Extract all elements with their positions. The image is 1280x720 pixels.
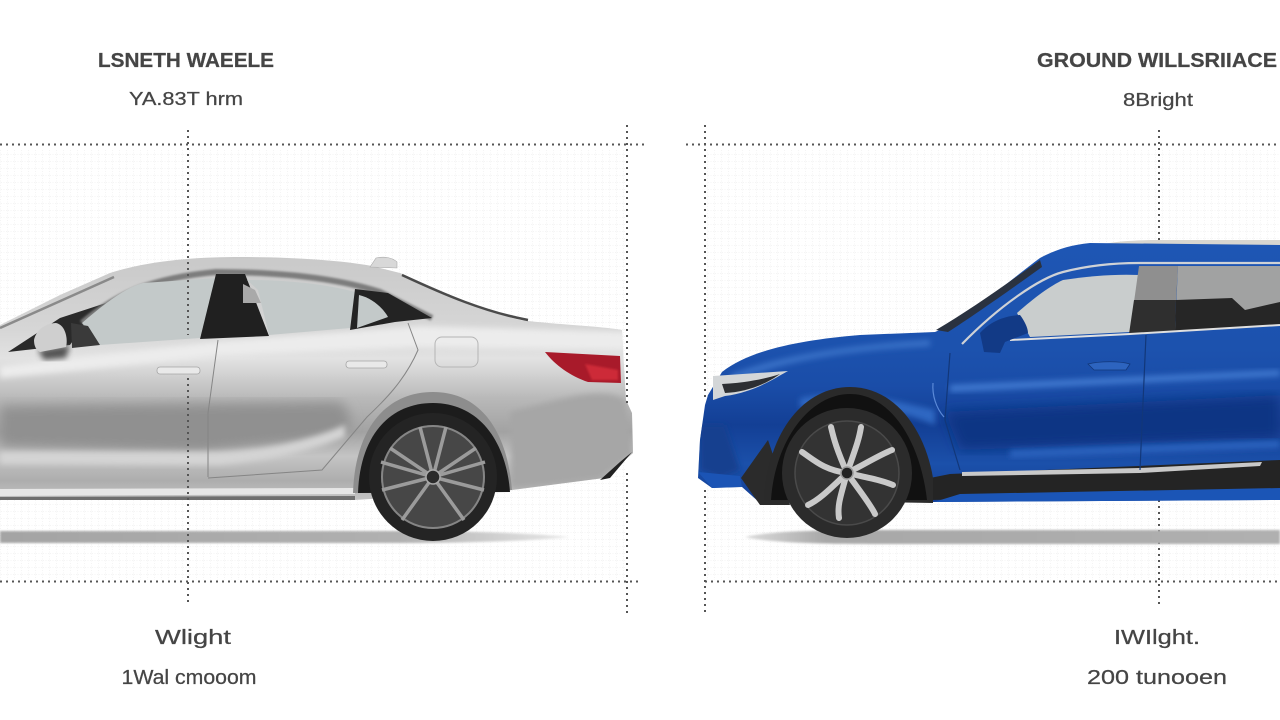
window top trim xyxy=(82,272,432,323)
wheel arch xyxy=(353,392,512,493)
mirror shadow xyxy=(38,345,70,360)
B-pillar xyxy=(200,274,269,339)
front window xyxy=(1017,275,1139,337)
wing mirror xyxy=(34,323,67,352)
dimension lines: right diagram xyxy=(686,125,1280,615)
vertical dimension lines: left diagram xyxy=(188,125,627,615)
blue SUV xyxy=(698,240,1280,538)
C-pillar dark triangle xyxy=(350,289,432,330)
label: right bottom: IWIlght. xyxy=(1114,627,1200,649)
rear window xyxy=(247,280,355,335)
fuel door xyxy=(435,337,478,367)
blue lower lip xyxy=(934,488,1280,502)
antenna fin xyxy=(370,257,397,268)
lower cladding xyxy=(930,460,1280,500)
rear headrest xyxy=(243,284,261,303)
chrome strip xyxy=(962,462,1262,476)
door handle: front xyxy=(157,367,200,374)
background grid panel: left xyxy=(0,150,625,580)
sedan body xyxy=(0,257,633,500)
rear cabin seats xyxy=(1175,298,1280,331)
front wheel xyxy=(782,408,912,538)
label: left bottom: Wlight xyxy=(155,627,232,649)
measurement: right bottom: 200 tunooen xyxy=(1087,667,1227,689)
window chrome xyxy=(962,263,1280,344)
door handle xyxy=(1088,362,1130,370)
ground shadow: silver car xyxy=(0,531,570,543)
background grid panel: right xyxy=(707,150,1280,580)
measurement: left bottom: 1Wal cmooom xyxy=(122,667,256,689)
rear wheel xyxy=(369,413,497,541)
rear window xyxy=(1175,266,1280,331)
silver sedan xyxy=(0,257,633,541)
headlight xyxy=(713,371,788,400)
tail light xyxy=(545,352,621,383)
SUV body xyxy=(698,243,1280,503)
horizontal dimension lines: left diagram xyxy=(0,144,645,582)
heading: left: LSNETH WAEELE xyxy=(98,50,274,72)
windshield trim xyxy=(0,277,114,328)
pillar upper xyxy=(1134,266,1178,302)
wheel arch xyxy=(764,387,933,503)
door handle: rear xyxy=(346,361,387,368)
SUV white roof rail xyxy=(1075,240,1280,254)
measurement: right top: 8Bright xyxy=(1123,90,1193,110)
front window xyxy=(82,278,216,345)
mirror sail xyxy=(71,323,100,348)
fender crease xyxy=(933,383,944,417)
heading: right: GROUND WILLSRIIACE xyxy=(1037,50,1277,72)
ground shadow: blue car xyxy=(745,530,1280,544)
rear bumper trim xyxy=(600,452,632,480)
rear window ledge line xyxy=(402,275,528,320)
door cut lines xyxy=(208,323,418,478)
pillar lower dark xyxy=(1129,300,1176,334)
measurement: left top: YA.83T hrm xyxy=(129,89,243,109)
wing mirror xyxy=(980,315,1028,353)
front lower cladding xyxy=(741,440,790,505)
belt line xyxy=(1010,325,1280,340)
A-pillar dark wedge xyxy=(8,303,106,352)
windshield wedge xyxy=(936,260,1042,332)
door shut lines xyxy=(945,335,1146,470)
rear quarter window xyxy=(357,295,388,328)
